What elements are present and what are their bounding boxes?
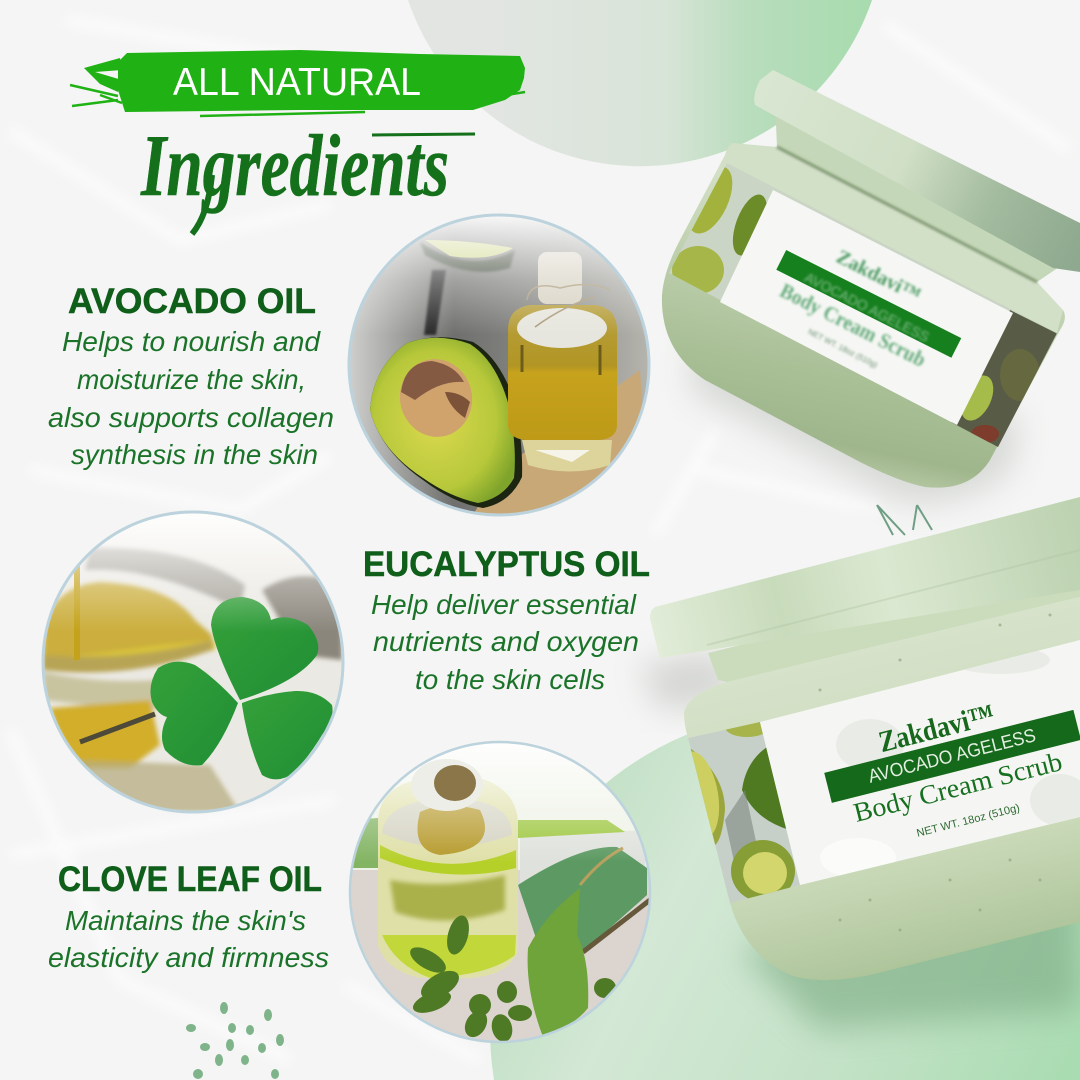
label: upper jar: [776, 246, 932, 372]
label: lower jar: Body Cream Scrub: [850, 746, 1065, 828]
text: eucalyptus oil: nutrients and oxygen: [373, 626, 639, 657]
text: clove leaf oil: [48, 860, 329, 973]
text: avocado oil: Helps to nourish and: [62, 326, 322, 357]
label: lower jar: AVOCADO AGELESS: [866, 725, 1038, 788]
circle: top backdrop: [408, 0, 872, 166]
photo circle: avocado and oil bottle: [349, 215, 650, 520]
label: upper jar: Body Cream Scrub: [776, 278, 930, 372]
title script: ingredients: Ingredients: [140, 118, 449, 215]
decoration: green dots: [186, 1002, 284, 1079]
text: eucalyptus oil: to the skin cells: [415, 664, 605, 695]
photo strip: lower jar: [688, 722, 800, 903]
circle: bottom backdrop: [490, 710, 1080, 1080]
photo circle: bottle and eucalyptus: [350, 742, 650, 1044]
text: eucalyptus oil: EUCALYPTUS OIL: [363, 545, 650, 584]
text: avocado oil: AVOCADO OIL: [68, 282, 316, 321]
label: upper jar: Zakdavi™: [833, 246, 924, 306]
label: lower jar: NET WT. 18oz (510g): [915, 802, 1021, 840]
photo strip: upper jar: [669, 160, 1060, 450]
title banner: all natural: [70, 50, 525, 116]
photo circle: oil bowl and clover: [43, 512, 343, 812]
text: clove leaf oil: Maintains the skin's: [65, 905, 306, 936]
text: avocado oil: synthesis in the skin: [71, 439, 318, 470]
jar: upper product: [662, 70, 1080, 502]
title script: ingredients: [140, 118, 475, 234]
title banner: all natural: ALL NATURAL: [173, 61, 421, 104]
clover leaves: [150, 597, 333, 779]
label: upper jar: NET WT. 18oz (510g): [806, 327, 879, 370]
label: upper jar: AVOCADO AGELESS: [802, 269, 932, 345]
bottle: [378, 778, 518, 978]
text: avocado oil: [48, 282, 334, 470]
text: avocado oil: also supports collagen: [48, 402, 334, 433]
decorative leaf marks: [877, 505, 932, 535]
text: clove leaf oil: elasticity and firmness: [48, 942, 329, 973]
text: avocado oil: moisturize the skin,: [77, 364, 306, 395]
label: lower jar: Zakdavi™: [875, 698, 998, 759]
text: clove leaf oil: CLOVE LEAF OIL: [58, 860, 322, 899]
jar: lower product: [640, 497, 1080, 1030]
label: lower jar: [850, 698, 1065, 840]
oil bottle: [508, 252, 617, 472]
text: eucalyptus oil: Help deliver essential: [371, 589, 637, 620]
bottle stopper: [411, 759, 483, 811]
text: eucalyptus oil: [363, 545, 650, 695]
